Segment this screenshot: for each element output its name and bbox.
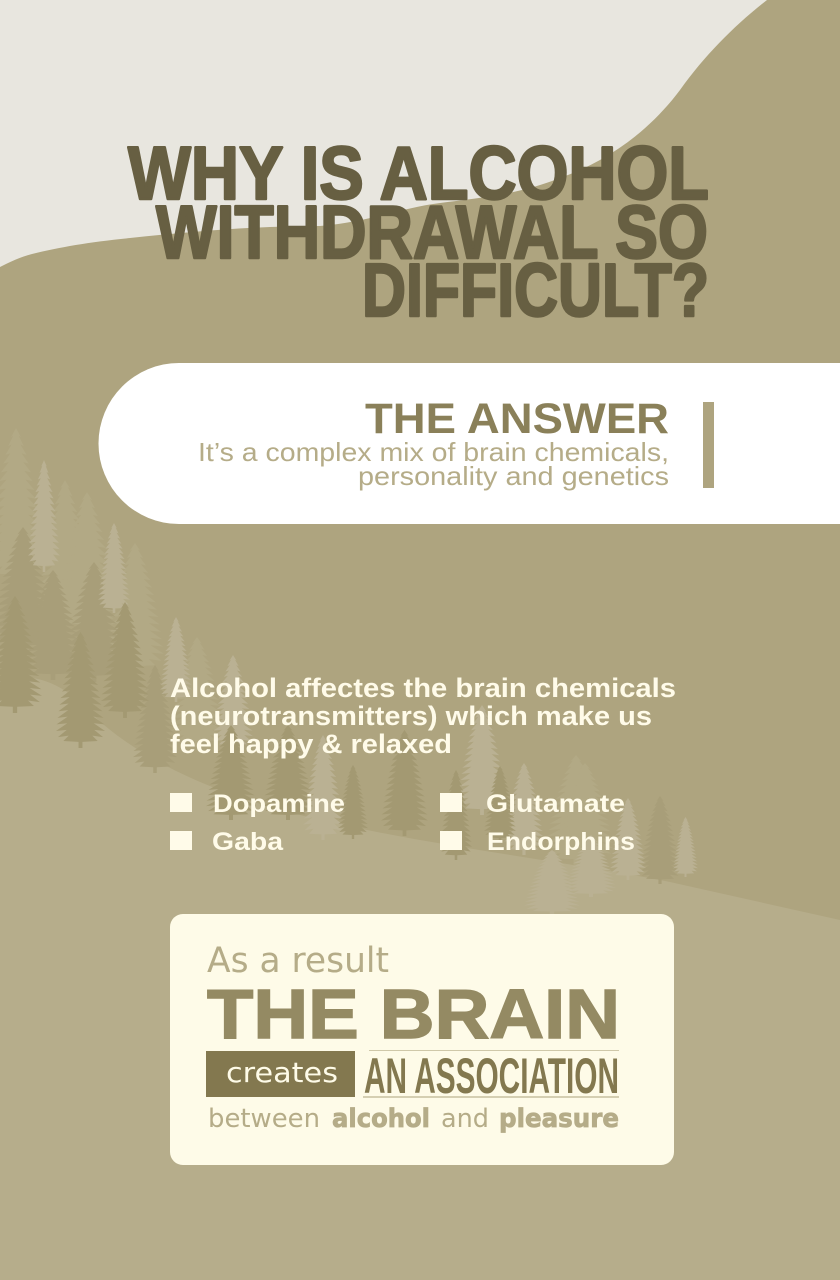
item: glutamate: Glutamate [486, 790, 625, 818]
between alcohol and pleasure: pleasure [499, 1104, 619, 1134]
item: endorphins: Endorphins [487, 828, 635, 856]
item: gaba: Gaba [212, 828, 284, 856]
title: WHY IS ALCOHOL [128, 131, 709, 215]
item: glutamate [440, 790, 625, 818]
item: gaba [170, 828, 284, 856]
answer text: It’s a complex mix of brain chemicals, [198, 437, 669, 467]
title: DIFFICULT? [362, 248, 709, 332]
item: dopamine: Dopamine [213, 790, 345, 818]
between alcohol and pleasure: alcohol [332, 1104, 430, 1134]
creates label [206, 1051, 355, 1097]
between alcohol and pleasure: and [441, 1104, 489, 1134]
answer text: personality and genetics [358, 461, 669, 491]
accent bar [703, 402, 714, 488]
answer heading: THE ANSWER [365, 395, 669, 443]
background: lower hill [0, 677, 840, 1280]
an association: AN ASSOCIATION [364, 1048, 619, 1104]
forest of pine trees [0, 428, 698, 915]
neurotransmitter list [170, 790, 635, 856]
as a result: As a result [207, 941, 389, 981]
the brain: THE BRAIN [207, 975, 620, 1053]
item: dopamine [170, 790, 345, 818]
intro paragraph [170, 673, 676, 759]
title: WITHDRAWAL SO [156, 190, 708, 274]
intro paragraph: Alcohol affectes the brain chemicals [170, 673, 676, 703]
intro paragraph: (neurotransmitters) which make us [170, 701, 652, 731]
title [128, 131, 709, 332]
between alcohol and pleasure [208, 1104, 619, 1134]
answer text [198, 437, 669, 491]
panel: as a result card [170, 914, 674, 1165]
intro paragraph: feel happy & relaxed [170, 729, 452, 759]
card background [170, 914, 674, 1165]
answer pill background [99, 363, 840, 524]
between alcohol and pleasure: between [208, 1104, 320, 1134]
panel: the answer [99, 363, 840, 524]
creates label: creates [226, 1056, 338, 1089]
